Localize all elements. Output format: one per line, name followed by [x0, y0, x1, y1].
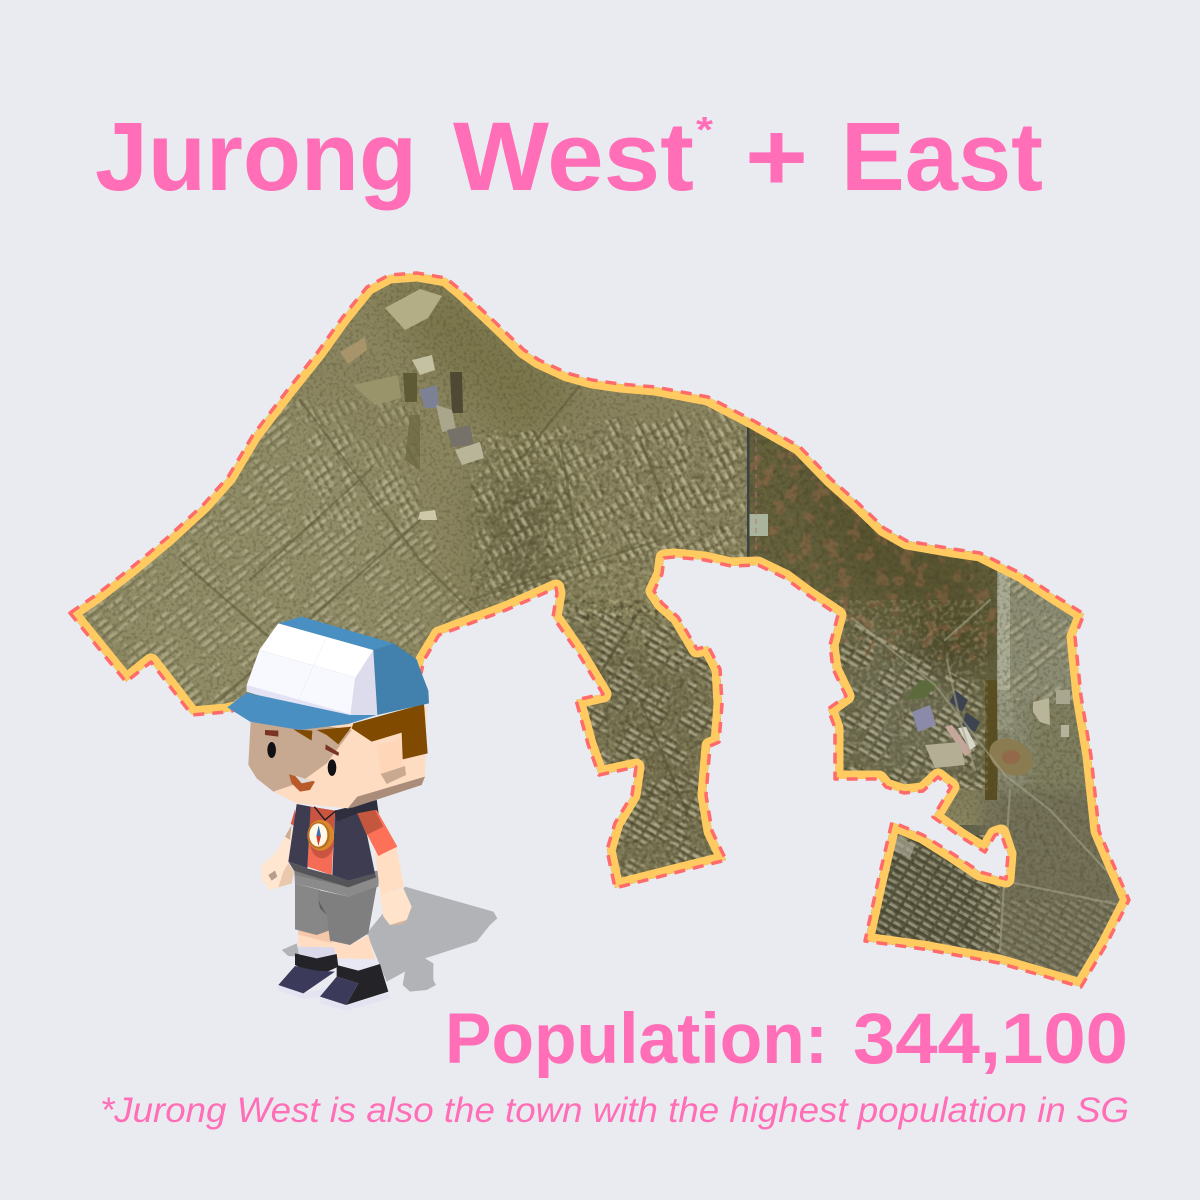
ground shadow [282, 887, 497, 992]
eyebrows [265, 730, 339, 756]
right shoe [319, 964, 390, 1011]
fine grain [60, 265, 1140, 995]
landmark patches [340, 289, 1070, 858]
residential blocks: west [70, 400, 470, 720]
compass pendant [307, 807, 336, 858]
head [248, 704, 428, 808]
map: Jurong West and East satellite outline [60, 265, 1140, 1000]
south east estates [865, 835, 1000, 960]
roads [180, 360, 1120, 950]
mouth [289, 774, 315, 792]
left arm and hand [262, 809, 296, 890]
population figure: 344,100 [853, 1000, 1128, 1079]
residential blocks: central [470, 400, 745, 610]
footnote: *Jurong West is also the town with the highest population in SG [100, 1091, 1129, 1130]
torso: shirt and vest [288, 800, 379, 887]
title: Jurong [95, 102, 417, 211]
title [95, 102, 1043, 211]
red dashed outline [70, 273, 1129, 987]
eyes [267, 742, 336, 776]
title: West [453, 102, 694, 211]
stadium [989, 738, 1032, 776]
boundary between West and East [747, 420, 750, 562]
shorts [294, 867, 379, 945]
title: + [745, 102, 808, 211]
population figure: Population: [445, 1000, 828, 1079]
satellite imagery texture [60, 265, 1140, 1000]
residential blocks: south leg [562, 609, 721, 885]
yellow border [70, 273, 1129, 987]
hair [293, 704, 428, 759]
population figure [445, 1000, 1128, 1079]
title: East [841, 102, 1043, 211]
character: explorer boy with cap [227, 617, 497, 1011]
east district tone [748, 415, 998, 785]
large white buildings [1033, 698, 1050, 725]
legs and socks [298, 930, 377, 971]
ear [377, 738, 406, 784]
town centre [905, 680, 940, 700]
title: * [696, 109, 713, 150]
left shoe [277, 953, 338, 999]
east estates [750, 420, 998, 660]
right arm and hand [357, 810, 412, 925]
cap [227, 617, 429, 730]
